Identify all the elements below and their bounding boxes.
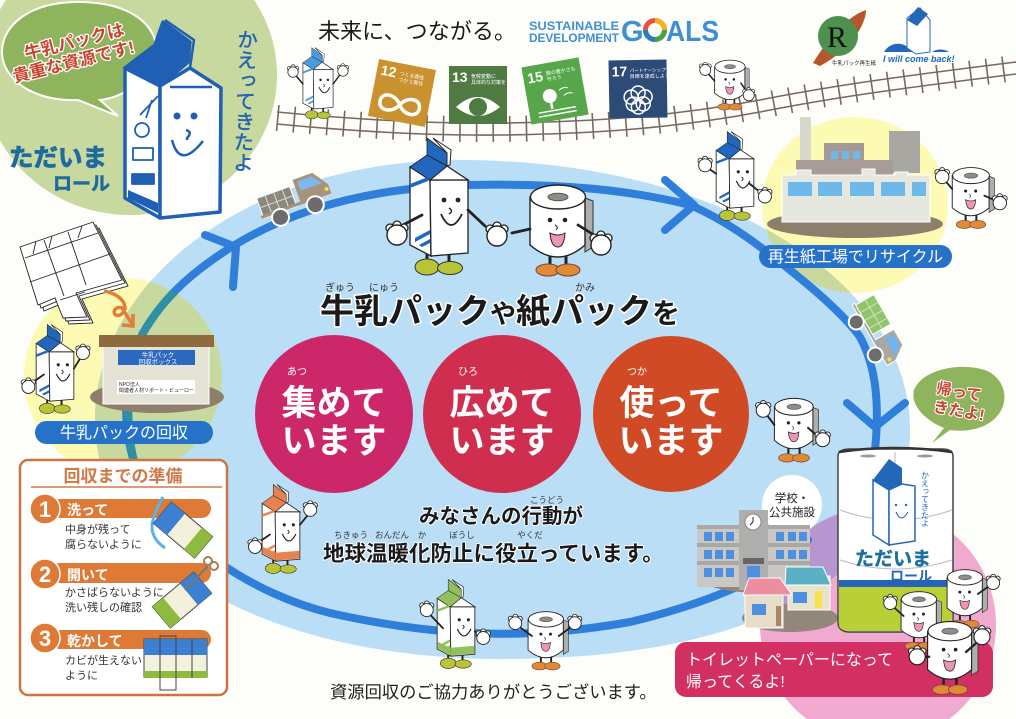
circle: using [593, 336, 749, 492]
step 3: dry: 3 [39, 626, 51, 651]
toilet roll product pack: ただいま [855, 548, 931, 570]
teal part of the loop over the green circle [124, 290, 178, 459]
step 2: open: 洗い残しの確認 [65, 600, 142, 614]
label: milk carton collection [35, 421, 213, 444]
panel heading: 回収までの準備 [64, 466, 182, 486]
truck top [253, 169, 336, 232]
SDG tile 17: 17 [612, 63, 628, 79]
step 2: open: かさばらないように [65, 586, 164, 599]
carton and roll shaking hands [386, 138, 612, 276]
carton mascot at collection [21, 324, 90, 414]
recycle logo R: R [827, 21, 847, 54]
factory scene [767, 117, 943, 238]
roll mascot on track [699, 60, 755, 110]
collection box: NPO法人 [119, 381, 140, 388]
cycle arrow loop [126, 180, 905, 634]
logo text: tadaima roll: ロール [53, 174, 110, 195]
message: your actions help prevent global warming: 地球温暖化防止に役立っています。 [323, 542, 664, 566]
label: recycling at paper mill: 再生紙工場でリサイクル [768, 248, 943, 266]
step 1: wash: 中身が残って [65, 522, 130, 536]
green carton mascot [420, 580, 490, 669]
thanks line: 資源回収のご協力ありがとうございます。 [330, 682, 657, 702]
I will come back logo: I will come back! [883, 54, 955, 64]
message: your actions help prevent global warming: か [418, 530, 427, 540]
SDG tile 13: 気候変動に [471, 73, 496, 80]
flattened cartons [20, 222, 128, 324]
step 2: open [30, 557, 218, 628]
message: your actions help prevent global warming [323, 495, 664, 566]
speech bubble: came back: きたよ! [932, 398, 986, 424]
step 1: wash: 腐らないように [65, 538, 142, 551]
collection box: 牛乳パック [142, 350, 174, 359]
orange curled arrow [104, 291, 133, 326]
message: your actions help prevent global warming: みなさんの行動が [419, 504, 583, 528]
SDG tile 12 [368, 59, 436, 127]
band: becomes toilet paper and comes back [675, 642, 993, 697]
SDGs logo: DEVELOPMENT [529, 31, 620, 45]
speech bubble: milk cartons are a valuable resource [2, 2, 156, 116]
SDG tile 15: 守ろう [546, 75, 562, 83]
collection box [90, 335, 224, 413]
message: your actions help prevent global warming: やくだ [517, 530, 543, 540]
roll mascot bottom [508, 612, 582, 670]
circle: collecting: あつ [287, 366, 307, 378]
SDG tile 12: つくる責任 [399, 70, 425, 82]
circle: collecting: います [281, 422, 387, 461]
SDG tile 15 [521, 57, 589, 125]
recycle logo R: 牛乳パック再生紙 [832, 59, 877, 67]
label: milk carton collection: 牛乳パックの回収 [60, 424, 188, 442]
circle: spreading: ひろ [458, 367, 478, 378]
blob: green circle behind big carton [0, 0, 277, 215]
speech bubble: came back: 帰って [935, 379, 983, 405]
message: your actions help prevent global warming: ぼうし [449, 530, 475, 540]
logo text: tadaima roll: ただいま [9, 145, 107, 172]
main heading: にゅう [369, 282, 399, 294]
main heading: 牛乳パックや紙パックを [320, 293, 680, 331]
light blue cycle area [95, 160, 910, 659]
title: future connection: 未来に、つながる。 [318, 19, 516, 44]
carton mascot near factory [698, 132, 772, 221]
SDG tile 15: 15 [526, 68, 544, 86]
orange carton mascot [248, 484, 317, 574]
school and houses scene [697, 510, 838, 632]
circle: spreading [423, 335, 581, 493]
toilet roll product pack: かえってきたよ [920, 471, 930, 527]
logo text: tadaima roll [9, 145, 110, 195]
recycle logo R [813, 10, 877, 67]
roll mascot near factory [935, 168, 1007, 229]
panel: preparation before collection [20, 460, 227, 695]
circle: using: 使って [619, 384, 723, 423]
vertical text: I came back: かえってきたよ [229, 29, 257, 173]
message: your actions help prevent global warming: こうどう [530, 495, 564, 505]
message: your actions help prevent global warming: ちきゅう [334, 530, 368, 540]
railway track [277, 62, 1016, 135]
collection box: 回収ボックス [139, 358, 177, 366]
step 1: wash: 1 [39, 497, 51, 522]
step 3: dry: カビが生えない [65, 653, 142, 667]
main heading: ぎゅう [325, 281, 355, 294]
band: becomes toilet paper and comes back: トイレットペーパーになって [686, 651, 893, 669]
step 2: open: 開いて [67, 567, 109, 583]
SDG tile 17 [608, 59, 671, 119]
blob: yellow circle behind collection box [24, 278, 222, 476]
roll mascot pointing [756, 398, 830, 462]
collection box: 関連者人材リポート・ビューロー [119, 387, 194, 394]
step 1: wash [30, 494, 213, 558]
truck right [841, 293, 908, 372]
step 3: dry [30, 623, 211, 690]
step 3: dry: ように [65, 669, 98, 682]
SDGs logo: ALS [666, 16, 719, 48]
overlap tints of blue area with circles [95, 229, 850, 604]
label: recycling at paper mill [759, 245, 952, 268]
circle: collecting [255, 335, 413, 493]
circle: using: います [618, 422, 724, 461]
SDG tile 12: 12 [380, 62, 398, 80]
I will come back logo [883, 7, 955, 64]
main heading: かみ [575, 282, 595, 294]
SDG tile 12: つかう責任 [398, 76, 424, 88]
big hand-drawn carton [125, 20, 221, 218]
SDG tile 15: 陸の豊かさも [545, 65, 576, 77]
circle: spreading: います [449, 422, 555, 461]
circle: spreading: 広めて [449, 384, 555, 423]
blob: pink circle behind toilet roll pack [760, 507, 996, 719]
SDG tile 17: パートナーシップで [630, 67, 671, 74]
step 3: dry: 乾かして [67, 633, 123, 649]
SDGs logo: G [621, 16, 644, 48]
message: your actions help prevent global warming: おんだん [375, 530, 409, 540]
step 2: open: 2 [39, 562, 51, 587]
SDG tile 13 [449, 66, 507, 124]
speech bubble: came back [913, 367, 1004, 443]
SDGs logo: SUSTAINABLE [529, 19, 619, 33]
toilet roll product pack [838, 448, 953, 632]
step 1: wash: 洗って [67, 502, 108, 518]
roll mascots group [883, 570, 1000, 694]
band: becomes toilet paper and comes back: 帰ってくるよ! [686, 673, 785, 691]
SDGs logo [529, 16, 719, 48]
carton mascot on track [287, 48, 349, 119]
SDG tile 17: 目標を達成しよう [630, 72, 670, 80]
circle: using: つか [627, 366, 647, 378]
speech bubble: milk cartons are a valuable resource: 貴重な資源です! [11, 38, 136, 86]
SDG tile 13: 13 [452, 69, 468, 85]
toilet roll product pack: ロール [890, 568, 932, 584]
SDG tile 13: 具体的な対策を [471, 79, 506, 86]
bubble: schools and public facilities: 公共施設 [769, 506, 815, 519]
blob: yellow circle behind factory [762, 117, 948, 293]
bubble: schools and public facilities [762, 475, 822, 535]
circle: collecting: 集めて [281, 384, 387, 423]
bubble: schools and public facilities: 学校・ [775, 491, 809, 505]
speech bubble: milk cartons are a valuable resource: 牛乳パックは [23, 20, 126, 63]
